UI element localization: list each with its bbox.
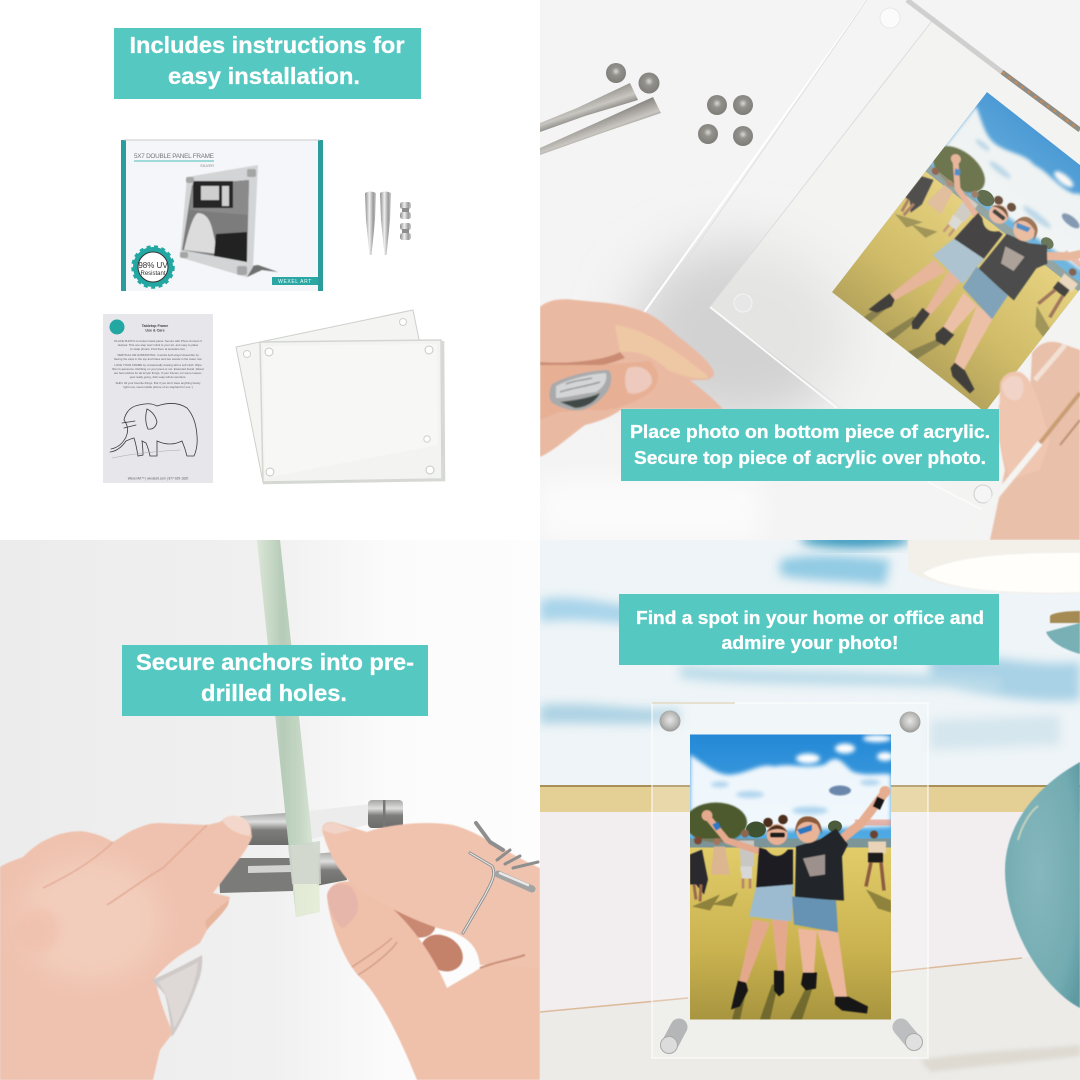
card body text: pets really going, dish soap will do wonders. <box>130 375 186 379</box>
product box <box>121 140 323 291</box>
caption 4 <box>619 594 999 665</box>
watercolor wall art <box>540 532 1080 790</box>
card body text: LOVE YOUR FRAME by occasionally dusting with a soft cloth. Wipe <box>114 363 202 367</box>
acrylic frame <box>652 703 928 1058</box>
left hand <box>0 816 252 1080</box>
white wall panel <box>540 812 1030 1011</box>
left hand <box>540 299 723 457</box>
festival photo under acrylic <box>828 89 1080 413</box>
shelf <box>540 952 1080 1080</box>
acrylic sheets <box>644 0 1080 504</box>
right hand <box>322 822 540 1080</box>
instruction card: Tabletop Frame <box>142 324 168 328</box>
UV seal: Resistant <box>140 271 166 277</box>
standoff top left <box>660 710 680 732</box>
caption 2: Secure top piece of acrylic over photo. <box>634 447 986 468</box>
card body text: right now, need cuddle picture of an elephant for use :) <box>123 385 193 389</box>
acrylic panels <box>236 310 444 483</box>
UV seal: 98% UV <box>138 261 168 270</box>
anchor pins <box>540 63 661 155</box>
caption 3: drilled holes. <box>201 680 347 706</box>
right hand <box>986 341 1080 540</box>
caption 3 <box>122 645 428 716</box>
acrylic rod edge <box>257 540 321 917</box>
silver ring <box>549 370 611 410</box>
caption 2: Place photo on bottom piece of acrylic. <box>630 421 990 442</box>
card body text: fiber is awesome. Rubbing on your piece is not. Extended brand. Wexel <box>112 367 204 371</box>
panel: place photo <box>540 0 1080 540</box>
caption 1: easy installation. <box>168 63 360 89</box>
card body text: VERTICAL OR HORIZONTAL: it works both ways! Assemble by <box>117 353 199 357</box>
card body text: desired. This one step won't stick to your art, and easy to place <box>118 343 199 347</box>
panel: kit contents <box>103 140 444 483</box>
caption 1: Includes instructions for <box>130 32 405 58</box>
brand label <box>272 277 318 285</box>
UV seal <box>132 246 174 288</box>
instruction card: Use & Care <box>145 328 165 332</box>
brand label: WEXEL ART <box>278 279 312 285</box>
card body text: SHIN. All your favorite things. But if you don't have anything handy <box>116 381 201 385</box>
silver ring <box>152 955 202 1037</box>
caption 1 <box>114 28 421 99</box>
card body text: to swap photos. Find them at wexelart.com. <box>130 347 186 351</box>
standoff bottom left <box>660 1027 679 1054</box>
festival photo <box>685 734 893 1020</box>
card body text: having the caps in the top and holes and two stands in the lower row. <box>114 357 202 361</box>
panel: secure anchors <box>0 540 540 1080</box>
lamp shade <box>908 540 1080 594</box>
card body text <box>112 339 204 389</box>
steel anchor pins <box>365 192 411 255</box>
instruction card: Wexel Art™ | wexelart.com | 877-929-1820 <box>128 476 189 480</box>
gold frame band <box>540 785 1080 812</box>
upper steel anchor <box>240 800 403 845</box>
card body text: PLACE PHOTO on bottom back panel. Secure with Photo Corners if <box>114 339 202 343</box>
standoff bottom right <box>901 1027 922 1050</box>
panel: finished frame on shelf <box>540 532 1080 1080</box>
caption 3: Secure anchors into pre- <box>136 649 414 675</box>
acrylic edge strip <box>907 0 1002 72</box>
caption 4: Find a spot in your home or office and <box>636 607 984 628</box>
instruction card <box>103 314 213 483</box>
lamp vase <box>1005 611 1080 1008</box>
caption 2 <box>621 409 999 481</box>
product box: SILVER <box>200 163 214 168</box>
standoff top right <box>900 712 920 732</box>
lower steel anchor <box>218 851 347 893</box>
framed photo on box <box>180 165 278 277</box>
small anchors <box>698 95 753 146</box>
caption 4: admire your photo! <box>722 632 898 653</box>
silver rings <box>463 823 538 933</box>
card body text: are best wishes for all acrylic things. If your frames, for some reason, <box>114 371 202 375</box>
box title: 5X7 DOUBLE PANEL FRAME <box>134 153 214 160</box>
elephant line drawing <box>110 403 197 458</box>
